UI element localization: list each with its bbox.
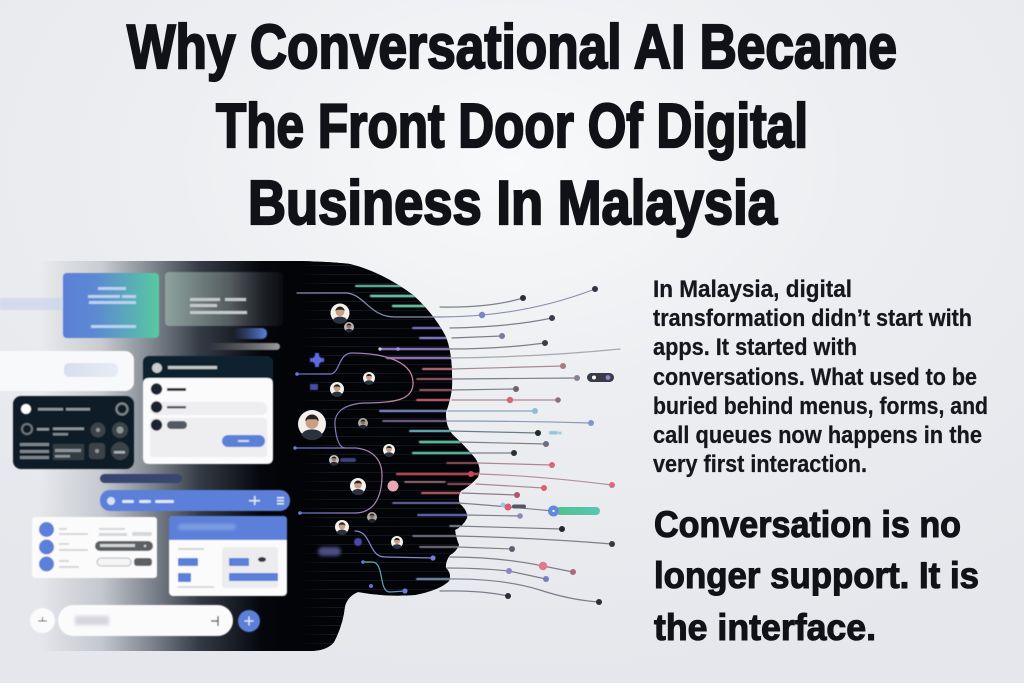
head silhouette: [40, 260, 500, 652]
dark control card: [13, 396, 134, 469]
data lines and endpoints: [297, 286, 620, 605]
key statement: Conversation is no: [654, 504, 961, 545]
mini tag: [549, 431, 562, 434]
intro text: In Malaysia, digital: [653, 276, 852, 303]
chat card: [143, 356, 273, 464]
gray card: [165, 272, 283, 326]
chat input bar: [30, 605, 260, 636]
pill in head: [318, 547, 341, 556]
illustration: AI head with interface panels: [0, 260, 620, 652]
dim bar: [100, 474, 182, 483]
intro text: apps. It started with: [653, 334, 857, 361]
tag near avatar: [340, 458, 356, 462]
key statement: longer support. It is: [654, 555, 979, 596]
toggle pill: [587, 373, 614, 382]
contact list card: [32, 517, 157, 578]
gray bar: [208, 343, 280, 350]
interface panels: [0, 272, 290, 636]
title: [127, 13, 897, 238]
intro text: very first interaction.: [653, 451, 867, 478]
intro text: conversations. What used to be: [653, 364, 977, 391]
form card: [169, 516, 287, 596]
avatars: [298, 304, 403, 549]
intro text: buried behind menus, forms, and: [653, 393, 988, 420]
intro text: transformation didn’t start with: [653, 305, 972, 332]
white card: [0, 351, 134, 391]
neural pathway curves: [293, 353, 436, 594]
pale bar: [0, 298, 64, 310]
green progress bar: [500, 502, 600, 516]
icon: grid: [310, 384, 318, 390]
key statement: the interface.: [654, 607, 876, 648]
key statement: [654, 504, 979, 648]
blue bar: [233, 328, 267, 339]
title: The Front Door Of Digital: [216, 92, 808, 161]
icon: gear: [310, 353, 324, 367]
intro text: call queues now happens in the: [653, 422, 982, 449]
icon: hexagon: [354, 538, 362, 546]
blue nav bar: [100, 490, 290, 511]
gradient card: [63, 273, 159, 338]
intro text: [653, 276, 988, 478]
title: Business In Malaysia: [248, 169, 777, 238]
